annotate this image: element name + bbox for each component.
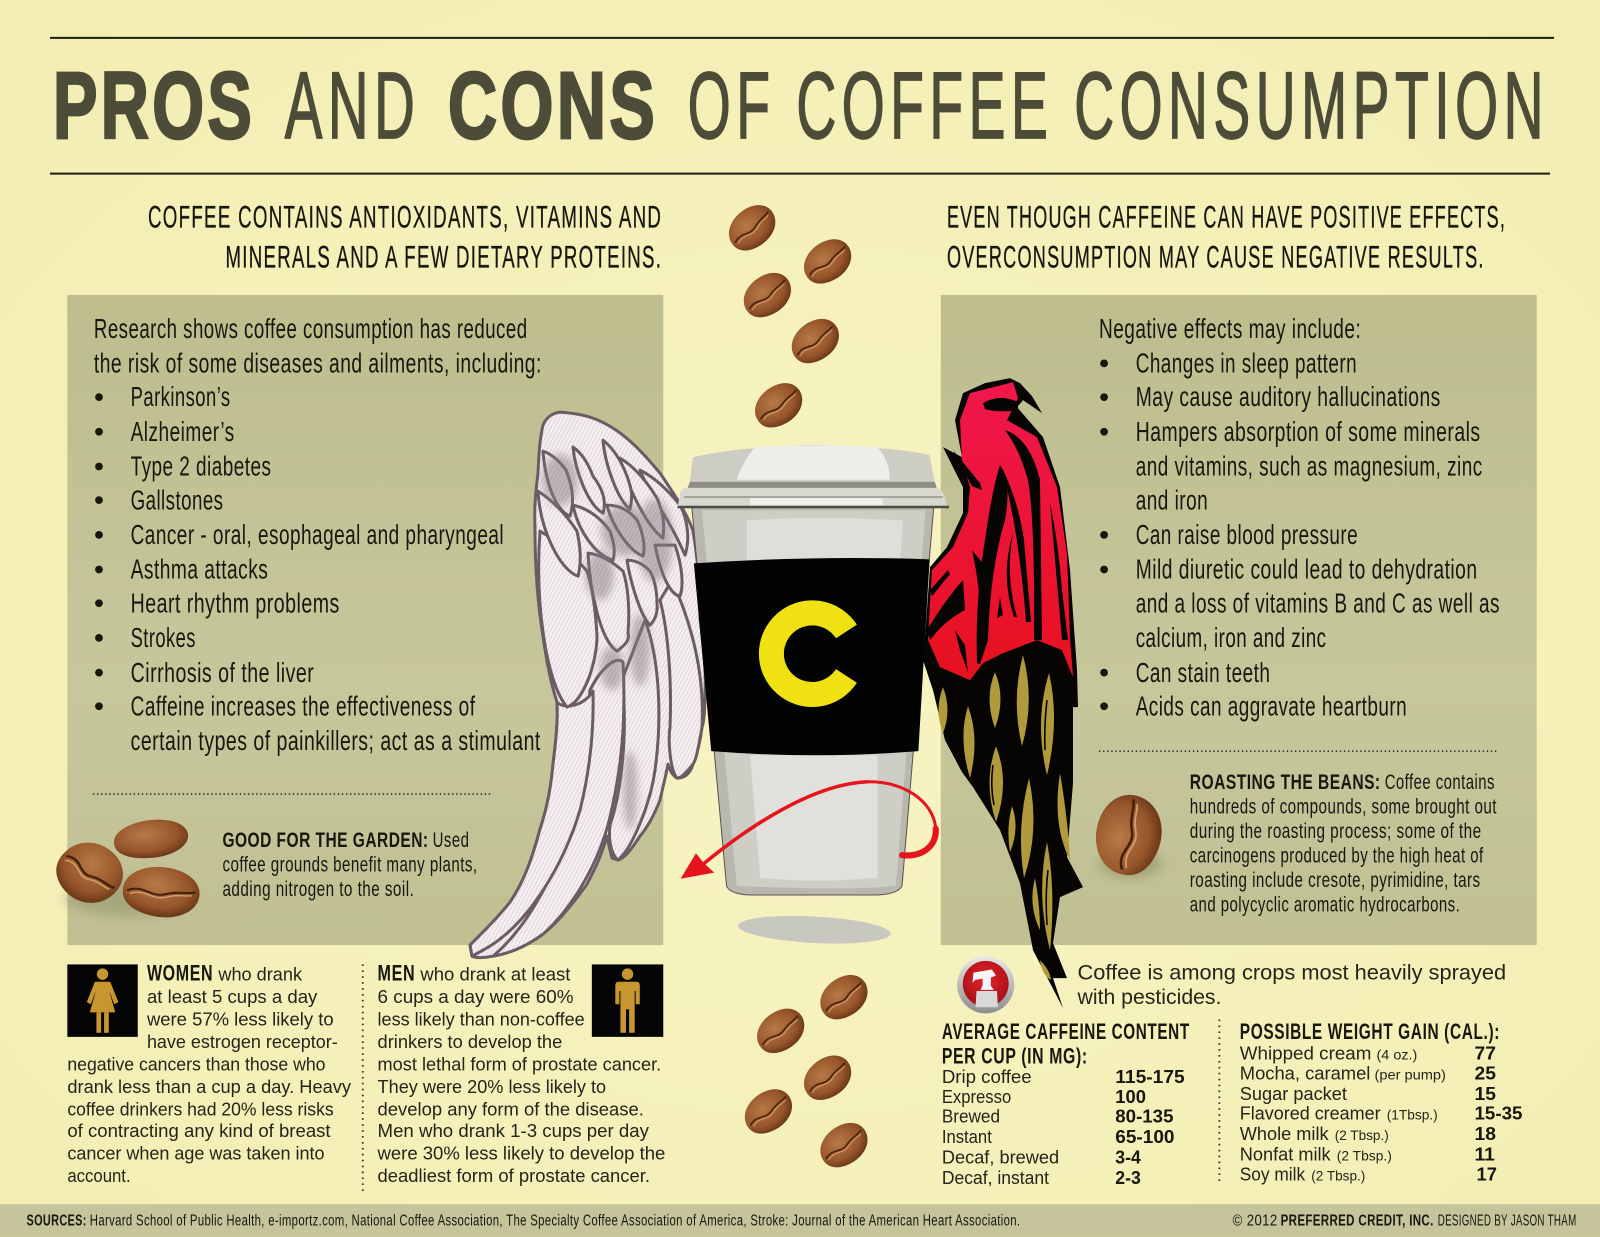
text: benefits list: Caffeine increases the effectiveness of — [131, 690, 476, 721]
footer band — [0, 1204, 1600, 1237]
title: PROS — [53, 53, 255, 159]
table: weight gain: (per pump) — [1374, 1068, 1446, 1083]
table: weight gain: (1Tbsp.) — [1387, 1108, 1438, 1123]
text: men: who drank at least — [419, 964, 571, 985]
table: weight gain: 15 — [1474, 1083, 1496, 1104]
table: weight gain: Nonfat milk — [1240, 1143, 1331, 1164]
callout: good for the garden: GOOD FOR THE GARDEN: — [222, 829, 429, 852]
table: caffeine content: 80-135 — [1115, 1106, 1173, 1127]
table: weight gain: 18 — [1474, 1123, 1496, 1144]
icon: falling coffee beans bottom — [737, 968, 876, 1174]
text: men: less likely than non-coffee — [378, 1009, 585, 1030]
subheading: pros: COFFEE CONTAINS ANTIOXIDANTS, VITAMINS AND — [148, 199, 662, 235]
text: negative effects list — [1099, 313, 1500, 721]
text: men: were 30% less likely to develop the — [377, 1142, 665, 1163]
callout: roasting the beans: roasting include cresote, pyrimidine, tars — [1190, 869, 1481, 892]
title block — [50, 38, 1554, 174]
text: women: were 57% less likely to — [146, 1009, 334, 1030]
table: weight gain: Whole milk — [1240, 1123, 1329, 1144]
table: weight gain: 25 — [1474, 1063, 1496, 1084]
callout: roasting the beans: carcinogens produced by the high heat of — [1190, 844, 1484, 867]
illustration: devil wing — [923, 378, 1083, 1008]
callout: good for the garden: adding nitrogen to the soil. — [222, 878, 414, 901]
text: negative effects list: Can stain teeth — [1136, 657, 1270, 688]
callout: roasting the beans: Coffee contains — [1385, 771, 1495, 794]
text: women: cancer when age was taken into — [67, 1142, 324, 1163]
text: pesticide note — [1077, 961, 1506, 1009]
table: caffeine content: 3-4 — [1115, 1146, 1141, 1167]
cup sleeve — [694, 558, 930, 755]
text: benefits list: Cancer - oral, esophageal and pharyngeal — [131, 519, 504, 550]
subheading: pros: MINERALS AND A FEW DIETARY PROTEINS. — [226, 238, 662, 274]
table: weight gain — [1240, 1019, 1522, 1185]
table: weight gain: Whipped cream — [1240, 1042, 1371, 1063]
text: men: develop any form of the disease. — [378, 1098, 644, 1119]
text: women: of contracting any kind of breast — [67, 1120, 331, 1141]
text: men: Men who drank 1-3 cups per day — [378, 1120, 650, 1141]
text: benefits list: Asthma attacks — [131, 554, 268, 585]
text: women: who drank — [217, 964, 303, 985]
table: caffeine content: PER CUP (IN MG): — [942, 1043, 1088, 1068]
icon: roasted bean — [1083, 786, 1174, 884]
text: benefits list: Parkinson’s — [131, 381, 231, 412]
text: negative effects list: Negative effects may include: — [1099, 313, 1361, 344]
illustration: angel wing — [470, 412, 705, 958]
callout: roasting the beans — [1190, 771, 1497, 916]
text: men: drinkers to develop the — [378, 1031, 562, 1052]
text: negative effects list: Changes in sleep pattern — [1136, 348, 1357, 379]
text: benefits list: Alzheimer’s — [131, 416, 235, 447]
text: pesticide note: with pesticides. — [1077, 985, 1221, 1009]
table: weight gain: (4 oz.) — [1377, 1047, 1417, 1062]
text: women: at least 5 cups a day — [147, 986, 318, 1007]
text: credits: PREFERRED CREDIT, INC. — [1281, 1213, 1434, 1230]
icon: man — [592, 964, 663, 1037]
text: women: negative cancers than those who — [67, 1054, 326, 1075]
text: sources: Harvard School of Public Health, e-importz.com, National Coffee Association, The Specialty Coffee Association of America, Stroke: Journal of the American Heart Association. — [90, 1213, 1020, 1230]
cup shadow — [737, 912, 891, 947]
callout: roasting the beans: during the roasting process; some of the — [1190, 820, 1482, 843]
table: caffeine content — [942, 1019, 1190, 1188]
callout: roasting the beans: ROASTING THE BEANS: — [1190, 771, 1381, 794]
text: women — [67, 961, 352, 1186]
text: men — [377, 961, 665, 1186]
table: weight gain: 11 — [1474, 1143, 1495, 1164]
callout: good for the garden: Used — [433, 829, 469, 852]
panel: cons background — [941, 295, 1537, 945]
text: men: deadliest form of prostate cancer. — [378, 1165, 650, 1186]
cup lid — [678, 445, 949, 508]
icon: three coffee beans — [46, 818, 204, 925]
text: negative effects list: Acids can aggravate heartburn — [1136, 690, 1407, 721]
table: caffeine content: AVERAGE CAFFEINE CONTENT — [942, 1019, 1190, 1044]
table: weight gain: (2 Tbsp.) — [1311, 1169, 1365, 1184]
text: men: MEN — [378, 961, 415, 986]
icon: pesticide spray — [957, 956, 1014, 1013]
text: benefits list: Type 2 diabetes — [131, 451, 271, 482]
table: caffeine content: Instant — [942, 1126, 992, 1147]
table: weight gain: (2 Tbsp.) — [1337, 1148, 1392, 1163]
text: benefits list: Strokes — [131, 622, 196, 653]
callout: good for the garden: coffee grounds benefit many plants, — [222, 854, 478, 877]
table: caffeine content: Expresso — [942, 1086, 1011, 1107]
text: negative effects list: May cause auditory hallucinations — [1136, 381, 1441, 412]
table: weight gain: Flavored creamer — [1240, 1103, 1381, 1124]
table: caffeine content: Brewed — [942, 1106, 1000, 1127]
text: benefits list: certain types of painkillers; act as a stimulant — [131, 725, 541, 756]
table: weight gain: Mocha, caramel — [1240, 1063, 1370, 1084]
text: benefits list: Heart rhythm problems — [131, 587, 340, 618]
table: caffeine content: Decaf, brewed — [942, 1146, 1059, 1167]
text: negative effects list: Can raise blood pressure — [1136, 519, 1358, 550]
text: men: most lethal form of prostate cancer. — [378, 1054, 661, 1075]
icon: woman — [67, 964, 138, 1037]
title: AND — [285, 53, 420, 159]
table: weight gain: (2 Tbsp.) — [1335, 1128, 1389, 1143]
illustration: coffee cup — [678, 445, 949, 947]
text: women: coffee drinkers had 20% less risks — [67, 1098, 334, 1119]
panel: pros background — [67, 295, 663, 945]
table: caffeine content: 100 — [1115, 1086, 1146, 1107]
text: credits — [1233, 1213, 1577, 1230]
text: negative effects list: calcium, iron and zinc — [1136, 622, 1327, 653]
table: caffeine content: 2-3 — [1115, 1167, 1141, 1188]
text: men: They were 20% less likely to — [378, 1076, 606, 1097]
text: sources — [27, 1213, 1020, 1230]
callout: roasting the beans: and polycyclic aromatic hydrocarbons. — [1190, 893, 1460, 916]
text: benefits list: the risk of some diseases and ailments, including: — [94, 348, 542, 379]
cup body — [692, 507, 934, 895]
table: caffeine content: 65-100 — [1115, 1126, 1174, 1147]
text: negative effects list: and iron — [1136, 484, 1208, 515]
text: credits: © 2012 — [1233, 1213, 1278, 1230]
text: women: account. — [67, 1165, 131, 1186]
title: CONS — [448, 53, 658, 159]
text: benefits list: Research shows coffee consumption has reduced — [94, 313, 528, 344]
text: sources: SOURCES: — [27, 1213, 87, 1230]
text: women: have estrogen receptor- — [147, 1031, 338, 1052]
table: caffeine content: 115-175 — [1115, 1066, 1185, 1087]
logo letter C — [771, 613, 846, 695]
icon: falling coffee beans top — [720, 198, 859, 434]
subheading: pros — [148, 199, 662, 274]
text: benefits list: Gallstones — [131, 484, 223, 515]
callout: good for the garden — [222, 829, 478, 901]
title — [53, 53, 1549, 159]
subheading: cons — [947, 199, 1506, 274]
table: caffeine content: Drip coffee — [942, 1066, 1032, 1087]
text: women: drank less than a cup a day. Heavy — [67, 1076, 352, 1097]
table: weight gain: 15-35 — [1474, 1103, 1522, 1124]
text: men: 6 cups a day were 60% — [378, 986, 574, 1007]
text: benefits list: Cirrhosis of the liver — [131, 657, 314, 688]
text: pesticide note: Coffee is among crops most heavily sprayed — [1078, 961, 1506, 985]
text: benefits list — [94, 313, 542, 756]
table: weight gain: Soy milk — [1240, 1164, 1306, 1185]
table: weight gain: 77 — [1474, 1042, 1496, 1063]
arrow: red curved — [681, 782, 936, 879]
text: women: WOMEN — [147, 961, 213, 986]
table: caffeine content: Decaf, instant — [942, 1167, 1050, 1188]
table: weight gain: 17 — [1477, 1164, 1497, 1185]
table: weight gain: Sugar packet — [1240, 1083, 1348, 1104]
